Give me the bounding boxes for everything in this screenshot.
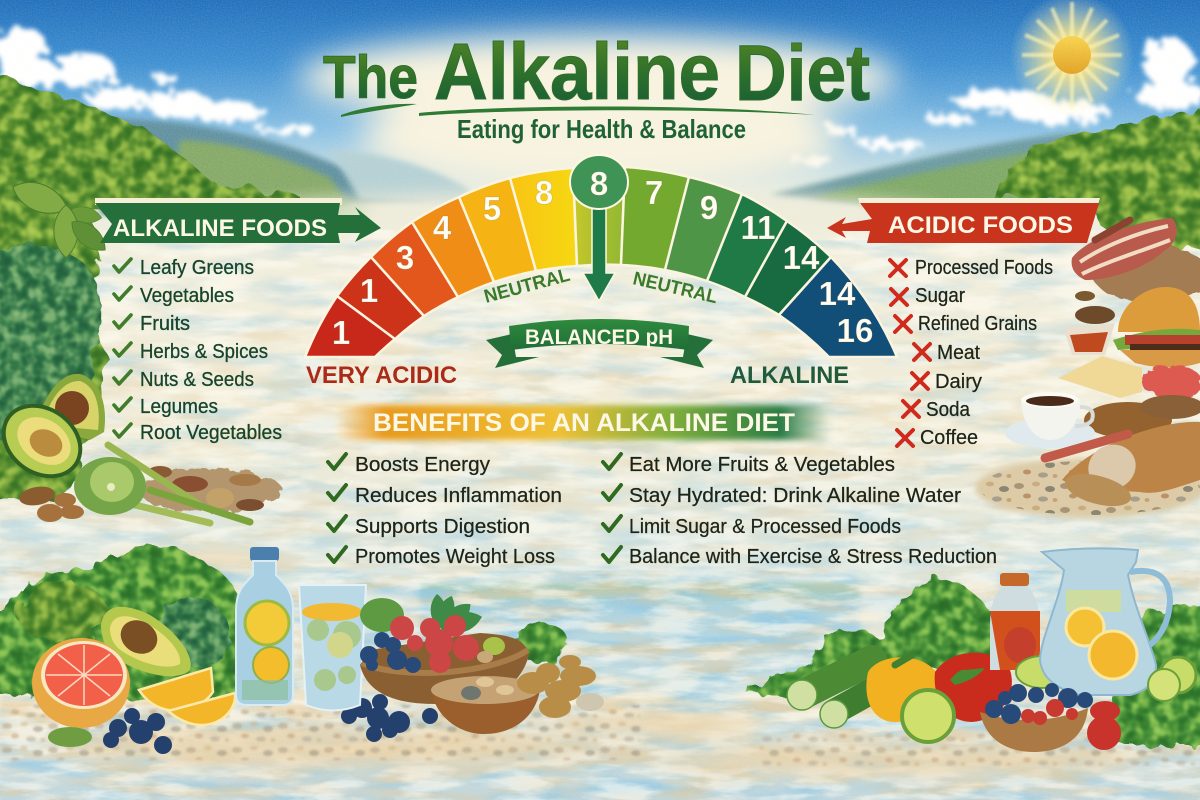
meat [1072,218,1177,280]
bottom right food group [745,548,1200,752]
pointer [570,155,628,301]
pointer: 8 [590,165,608,202]
left side foods [0,374,282,523]
mottling paint [0,230,1200,800]
water glass [299,585,366,710]
cheese [1058,356,1142,398]
items: Processed Foods [915,257,1053,279]
clouds right [788,38,1200,164]
items: Coffee [920,427,978,449]
title: Alkaline [434,27,720,116]
title: Diet [735,28,870,117]
condiment glass [1063,291,1115,355]
lemon wedges [139,668,235,725]
acidic foods banner [827,198,1100,243]
title [323,27,870,117]
benefit items: Boosts Energy [355,454,490,476]
red pepper [935,653,1012,722]
balanced pH ribbon: BALANCED pH [525,326,673,349]
crosses [890,260,930,446]
title: The [323,44,418,111]
subtitle: Eating for Health & Balance [457,114,746,144]
right forest [985,100,1200,255]
items: Legumes [140,396,218,418]
wooden bowl [360,633,529,704]
grapefruit [32,638,130,728]
gauge numbers: 8 [535,174,553,211]
acidic foods list [890,257,1053,449]
gauge numbers: 4 [433,209,452,246]
acidic foods banner: ACIDIC FOODS [888,212,1073,239]
items: Vegetables [140,285,234,307]
gauge numbers: 1 [360,272,378,309]
moss [48,727,92,747]
benefit items: Supports Digestion [355,516,530,538]
avocado half [0,388,97,494]
left forest [0,60,300,500]
title swoosh [341,104,815,117]
gauge numbers: 16 [837,312,873,349]
sea [420,583,860,703]
neutral labels: NEUTRAL [482,265,573,308]
far greens [512,622,568,662]
pastry [1084,402,1172,438]
benefit items: Promotes Weight Loss [355,546,555,568]
left leaves [745,630,880,700]
benefits heading [335,405,830,440]
gauge numbers: 14 [819,275,856,312]
juice jar [990,573,1040,670]
gauge numbers: 7 [645,174,663,211]
items: Herbs & Spices [140,341,268,363]
food pile [138,466,282,512]
items [915,257,1053,449]
items: Root Vegetables [140,422,282,444]
burger [1113,287,1200,368]
title block [323,27,870,144]
avocado [101,607,191,676]
greens mass [0,546,240,700]
back lime [1016,656,1068,688]
parsley mass [870,578,995,670]
tips items: Stay Hydrated: Drink Alkaline Water [629,485,961,507]
items: Meat [937,342,980,364]
benefit items: Reduces Inflammation [355,485,562,507]
mid valley band [230,200,370,220]
pebbles right [760,732,1200,766]
pebbles left [0,705,640,760]
asparagus [108,445,250,523]
items: Soda [926,399,971,421]
berry bowl [980,683,1093,752]
sand patches [60,550,1140,776]
items: Leafy Greens [140,257,254,279]
tips items: Limit Sugar & Processed Foods [629,516,901,538]
gauge numbers: 9 [700,189,718,226]
bottom left food group [0,546,438,754]
alkaline foods banner [95,198,381,243]
gauge numbers: 11 [741,209,775,246]
hills right [770,132,1080,225]
tips items: Balance with Exercise & Stress Reduction [629,546,997,568]
gauge segments [305,166,897,357]
gauge numbers: 14 [783,239,820,276]
coffee cup [1005,392,1095,448]
title glow [298,34,898,192]
salad greens and herb leaves [360,593,485,638]
fruit and nut bowls [360,593,604,734]
water bottle [236,547,293,705]
nuts pile [517,655,604,718]
pebble pile [975,458,1200,518]
items: Dairy [935,371,982,393]
benefit checks [328,454,621,562]
lettuce highlight [17,582,107,642]
pitcher [1040,548,1170,695]
items: Nuts & Seeds [140,369,254,391]
balanced pH ribbon [486,319,713,368]
items: Refined Grains [918,313,1037,335]
front lime [902,690,954,742]
neutral right label: NEUTRAL [631,268,720,308]
alkaline foods list [114,257,282,444]
large leaves [8,174,112,258]
very acidic label: VERY ACIDIC [306,362,457,389]
right greens behind pitcher [1110,607,1200,745]
right side foods [975,218,1200,518]
blueberries [103,694,438,754]
gauge numbers: 5 [483,190,501,227]
avocado whole [35,374,105,440]
strawberries [1087,701,1121,750]
gauge numbers [332,174,873,351]
pH gauge [305,155,897,389]
hills left [100,118,430,215]
clouds left [0,26,315,135]
benefits heading: BENEFITS OF AN ALKALINE DIET [373,409,795,437]
broccoli [156,597,228,669]
tips items [629,454,997,568]
checks [114,259,131,437]
bread loaf [1045,422,1200,512]
brown bread behind meat [1092,244,1200,302]
cream haze [260,190,940,234]
cabbage [74,457,146,515]
benefits section [328,405,997,568]
kale [0,245,101,440]
small bowl [431,690,540,734]
red food [1142,365,1200,399]
gauge numbers: 3 [396,239,414,276]
alkaline foods banner: ALKALINE FOODS [113,215,327,242]
items [140,257,282,444]
benefit items [355,454,562,568]
cucumbers [787,660,872,728]
alkaline label: ALKALINE [730,362,849,389]
right limes [1148,657,1196,701]
tips items: Eat More Fruits & Vegetables [629,454,895,476]
yellow pepper [866,655,938,722]
items: Sugar [915,285,965,307]
nuts [18,484,84,522]
items: Fruits [140,313,190,335]
gauge numbers: 1 [332,314,350,351]
berries in bowl [360,632,421,673]
sun [1010,0,1134,117]
